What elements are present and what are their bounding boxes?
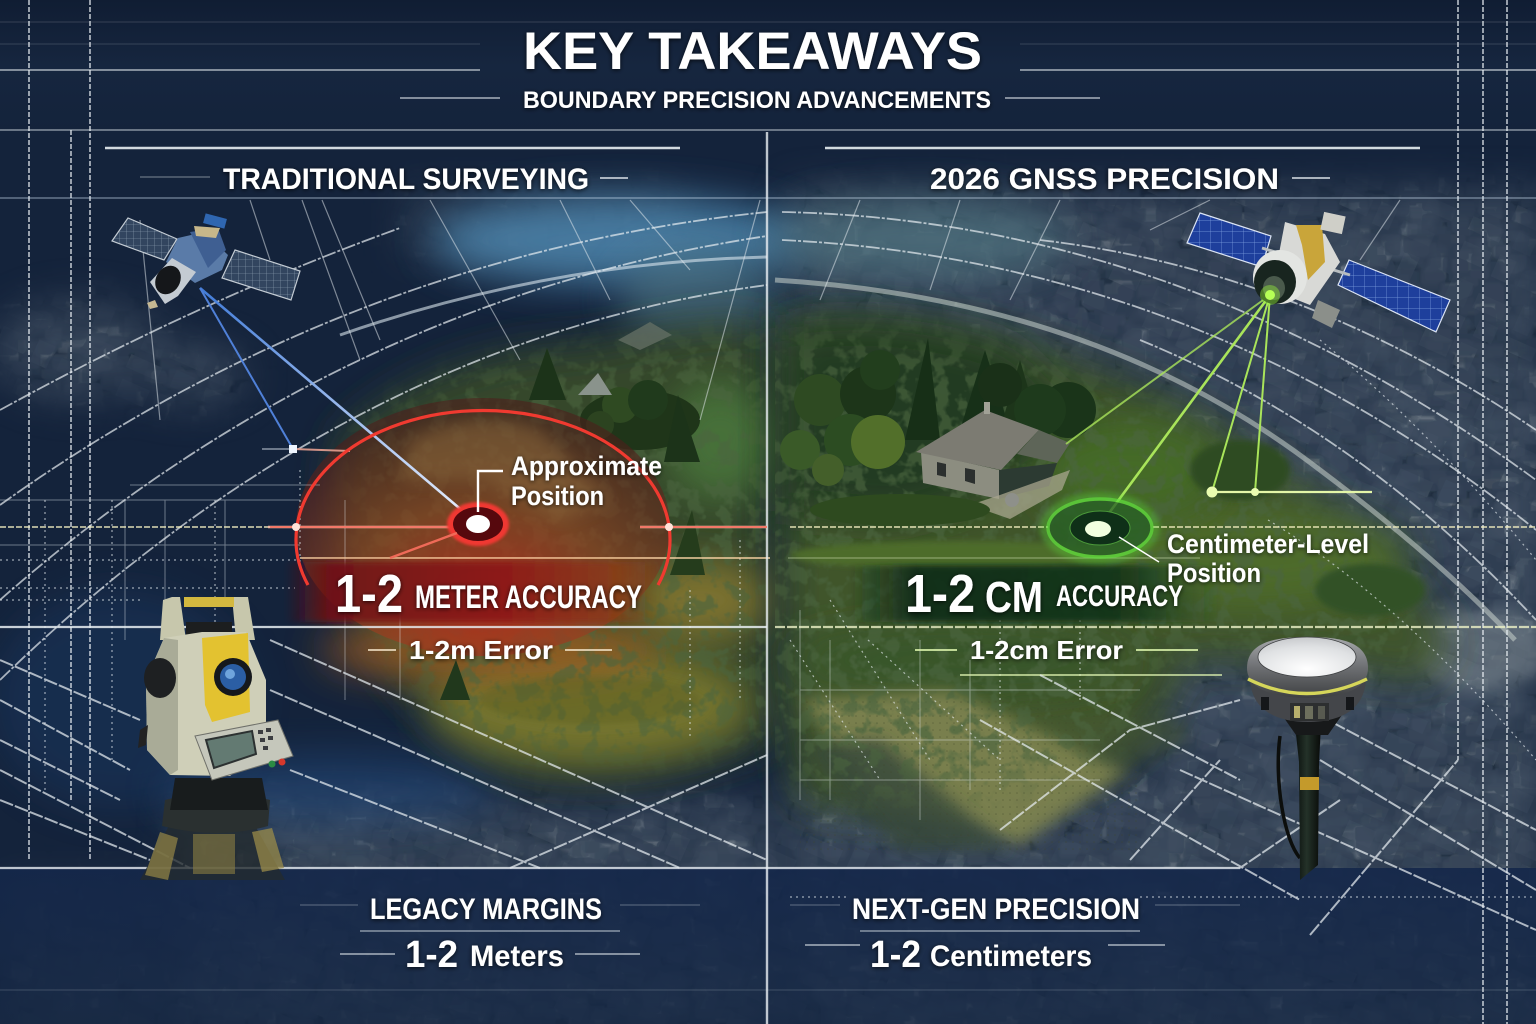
panel: right landscape (GNSS precision) [754, 178, 1468, 856]
approximate position marker [390, 471, 509, 558]
house [916, 402, 1070, 519]
stat: 1-2 cm accuracy: 1-2 [905, 564, 975, 624]
stat: 1-2cm error: 1-2cm Error [970, 635, 1123, 665]
stat: 1-2 cm accuracy [905, 564, 1183, 624]
footer: legacy margins: 1-2 [405, 934, 458, 976]
stat: 1-2 meter accuracy: 1-2 [335, 564, 403, 624]
red horizontal position line [268, 523, 767, 531]
signal nodes [1206, 486, 1259, 498]
label: approximate position: Position [511, 481, 604, 511]
title: KEY TAKEAWAYS [523, 22, 982, 81]
heading: 2026 GNSS precision: 2026 GNSS PRECISION [930, 163, 1279, 196]
stat: 1-2 meter accuracy [335, 564, 642, 624]
footer: legacy margins [370, 893, 602, 976]
red accuracy ellipse fill [296, 398, 670, 656]
footer: next-gen precision: NEXT-GEN PRECISION [852, 893, 1140, 926]
red ellipse outline [296, 411, 670, 585]
icon: right satellite [1187, 212, 1450, 332]
brown terrain patch inside ellipse [400, 420, 610, 520]
dark green band behind accuracy text [850, 565, 1220, 622]
label: approximate position: Approximate [511, 451, 662, 481]
stat: 1-2m error: 1-2m Error [409, 635, 553, 665]
footer: next-gen precision [852, 893, 1140, 976]
label: approximate position [511, 451, 662, 511]
footer: legacy margins: Meters [470, 940, 564, 973]
footer band [0, 868, 1536, 1024]
header band [0, 0, 1536, 132]
icon: left satellite [112, 213, 300, 309]
label: centimeter-level position [1167, 529, 1369, 588]
dark red band behind accuracy text [285, 562, 660, 622]
footer: legacy margins: LEGACY MARGINS [370, 893, 602, 926]
subtitle: BOUNDARY PRECISION ADVANCEMENTS [523, 87, 991, 114]
centimeter position marker [1040, 492, 1160, 564]
footer: next-gen precision: Centimeters [930, 940, 1092, 973]
arrow: left satellite signal beams [200, 288, 478, 524]
icon: GNSS receiver antenna [1247, 637, 1368, 880]
label: centimeter-level position: Position [1167, 558, 1261, 588]
forest [780, 338, 1096, 486]
icon: forest and house on right [780, 338, 1425, 616]
heading: traditional surveying: TRADITIONAL SURVEYING [223, 163, 589, 196]
stat: 1-2 cm accuracy: ACCURACY [1056, 580, 1183, 613]
arrow: right satellite green beams [1066, 295, 1372, 528]
icon: total station on tripod [138, 597, 293, 880]
panel: left landscape (traditional surveying) [304, 170, 811, 796]
label: centimeter-level position: Centimeter-Level [1167, 529, 1369, 559]
stat: 1-2 cm accuracy: CM [985, 573, 1043, 622]
footer: next-gen precision: 1-2 [870, 934, 921, 976]
shrubs and field [790, 440, 1425, 616]
stat: 1-2 meter accuracy: METER ACCURACY [415, 579, 642, 615]
icon: trees behind left ellipse [440, 322, 705, 724]
